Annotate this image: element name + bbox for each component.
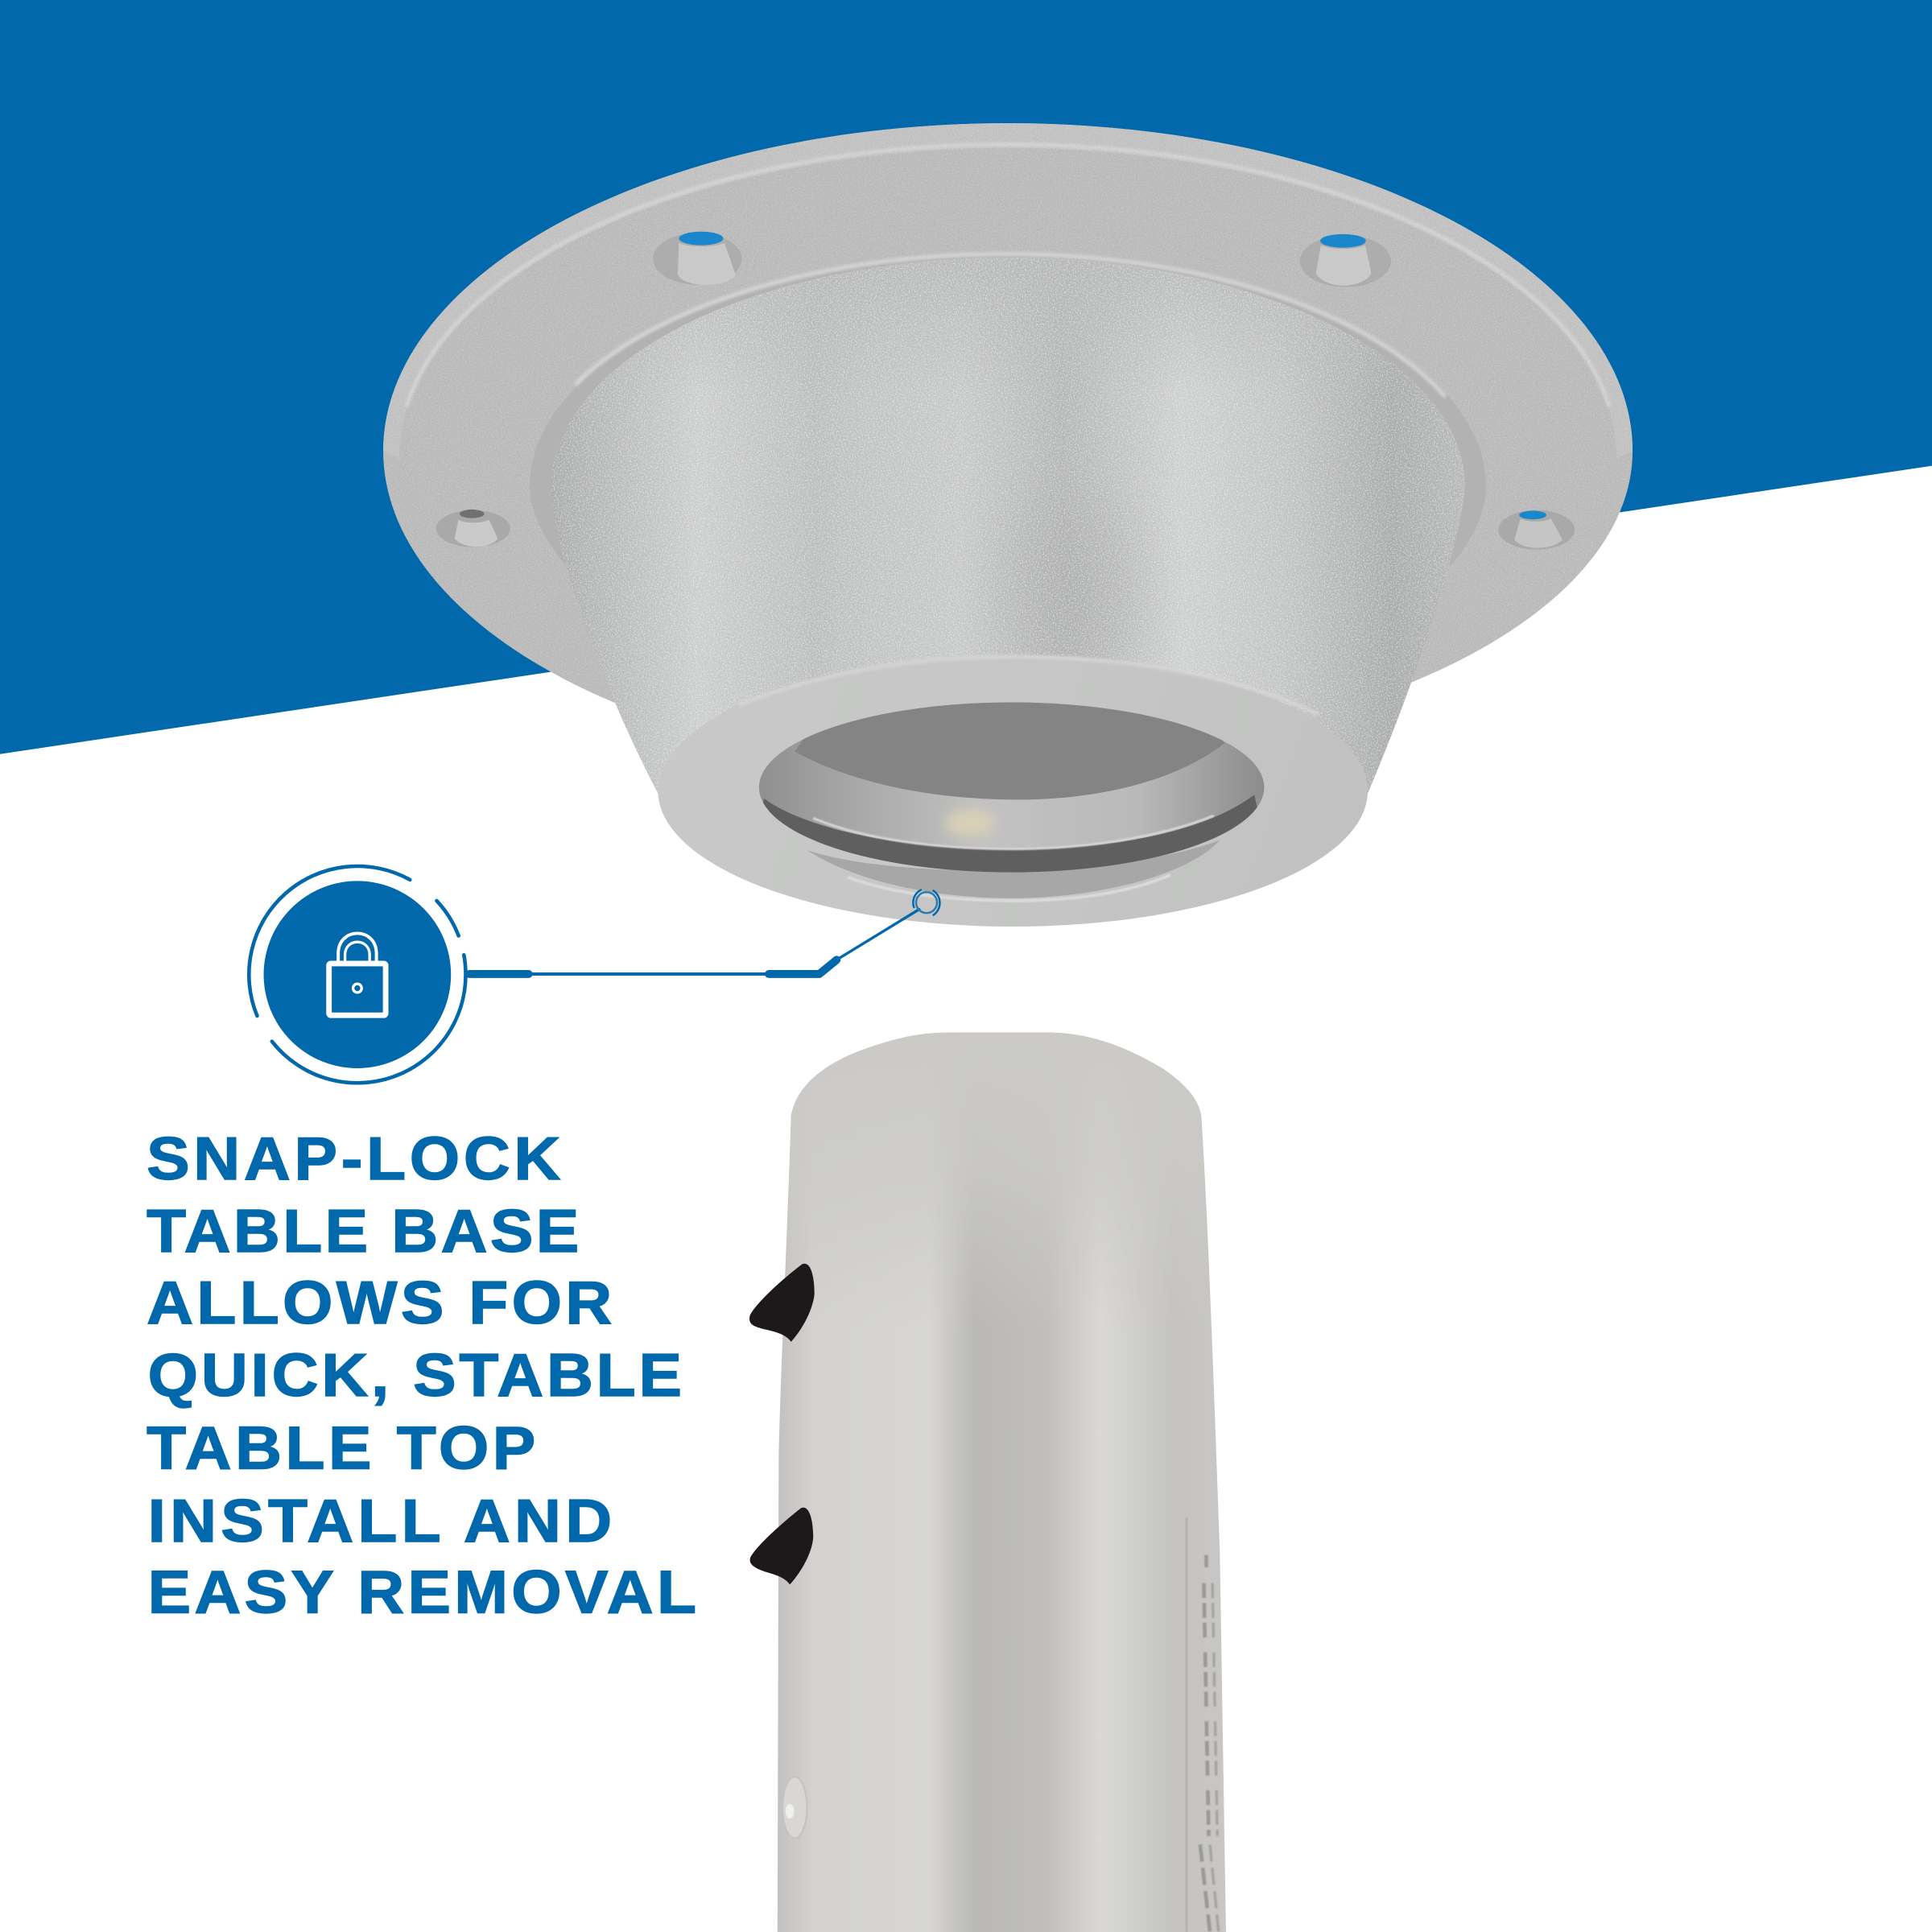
callout badge circle: [264, 881, 451, 1068]
cone shoulder highlight: [576, 254, 1445, 397]
heading text: TABLE TOP: [147, 1415, 535, 1482]
cone grain: [542, 246, 1479, 813]
boss: right: [1498, 510, 1575, 550]
connector line: [469, 910, 919, 974]
bottom ring: [658, 655, 1368, 927]
boss: left: [436, 510, 510, 547]
socket ledge: [807, 840, 1220, 898]
table post: [749, 1033, 1226, 1932]
flange rim highlight: [407, 144, 1609, 407]
cone central shading: [1010, 499, 1133, 683]
upper locking peg: [749, 1264, 815, 1342]
groove highlight: [813, 815, 1214, 849]
flange grain: [383, 123, 1633, 703]
heading text: ALLOWS FOR: [147, 1269, 612, 1336]
callout dashed ring: [249, 866, 465, 1083]
heading text: [147, 1125, 696, 1626]
socket back wall: [795, 702, 1225, 800]
cone fillet: [530, 254, 1486, 592]
socket inner lip: [758, 723, 1264, 852]
flange outer rim band: [383, 123, 1633, 458]
target marker: [913, 890, 939, 915]
icon: padlock: [329, 933, 386, 1015]
ledge highlight: [848, 875, 1170, 901]
background: diagonal blue band: [0, 0, 1932, 754]
heading text: TABLE BASE: [147, 1198, 579, 1265]
socket: [758, 702, 1264, 873]
cone top shading: [551, 258, 1465, 487]
boss: top left: [653, 232, 741, 285]
mount flange and cone: [369, 111, 1651, 927]
heading text: QUICK, STABLE: [148, 1343, 682, 1410]
ring top edge highlight: [739, 657, 1319, 715]
cone body: [551, 258, 1465, 794]
lower locking peg: [750, 1508, 813, 1584]
post screw: [782, 1777, 807, 1839]
socket dark groove: [763, 795, 1257, 873]
socket light reflection: [945, 810, 994, 836]
heading text: SNAP-LOCK: [147, 1125, 560, 1192]
post stamped marking: [1187, 1518, 1219, 1932]
boss: top right: [1300, 234, 1391, 287]
flange plate: [383, 123, 1633, 775]
callout: snap-lock: [249, 866, 939, 1083]
heading text: INSTALL AND: [148, 1488, 612, 1554]
heading text: EASY REMOVAL: [148, 1559, 696, 1626]
